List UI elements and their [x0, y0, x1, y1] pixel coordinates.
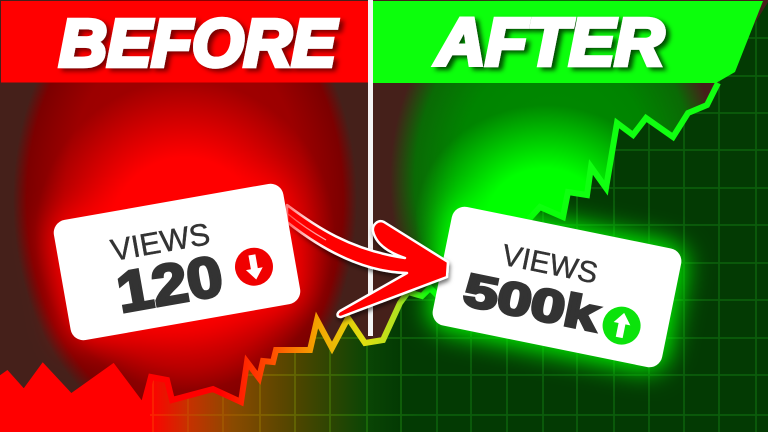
number: 500k: 500k: [460, 263, 604, 341]
label: VIEWS: VIEWS: [499, 239, 601, 290]
panel: after header: [373, 1, 763, 83]
red radial glow: [13, 0, 357, 432]
panel: before header: [1, 1, 368, 82]
green radial glow: [390, 0, 720, 390]
label: VIEWS: VIEWS: [108, 216, 213, 268]
growth line chart: [0, 83, 718, 407]
icon: up arrow badge: [599, 303, 644, 348]
divider line: [368, 0, 373, 336]
heading: AFTER: AFTER: [434, 5, 664, 80]
arrow: red curved arrow: [287, 205, 448, 317]
heading: BEFORE: BEFORE: [59, 6, 338, 81]
number: 120: 120: [112, 244, 228, 325]
card: after views: [424, 199, 690, 375]
card: before views: [47, 177, 307, 347]
icon: down arrow badge: [232, 245, 276, 289]
